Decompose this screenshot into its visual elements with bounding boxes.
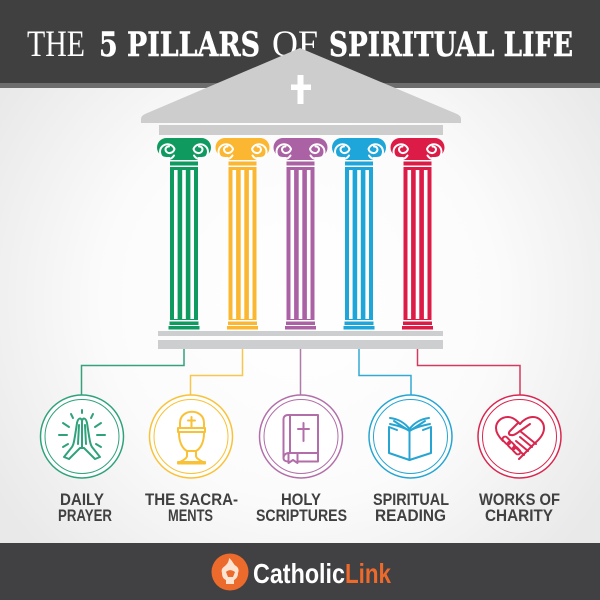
label: holy scriptures: HOLY	[281, 491, 321, 509]
title: THE	[27, 24, 85, 65]
temple roof	[141, 48, 461, 123]
connector: red	[418, 349, 520, 395]
pillar: yellow	[216, 138, 270, 330]
circle icon: praying hands	[40, 395, 124, 478]
circle icon: bible	[260, 395, 342, 478]
pillar: green	[157, 138, 211, 330]
entablature	[159, 125, 443, 135]
connector: blue	[359, 349, 411, 395]
icon: flame cup	[212, 554, 248, 590]
icon: roof cross	[291, 75, 311, 104]
label: the sacraments: THE SACRA-	[145, 491, 238, 509]
item: spiritual reading	[369, 395, 452, 525]
label: works of charity	[479, 491, 560, 525]
pillar: red	[390, 138, 444, 330]
label: the sacraments	[145, 491, 238, 525]
item: the sacraments	[145, 395, 238, 525]
label: spiritual reading: SPIRITUAL	[373, 491, 449, 509]
label: holy scriptures: SCRIPTURES	[256, 507, 347, 525]
title	[27, 24, 573, 65]
circle icon: heart handshake	[478, 395, 561, 478]
pillar: purple	[274, 138, 328, 330]
item: daily prayer	[40, 395, 124, 525]
label: daily prayer: PRAYER	[58, 507, 112, 525]
label: works of charity: CHARITY	[485, 507, 553, 525]
label: works of charity: WORKS OF	[479, 491, 560, 509]
circle icon: chalice	[150, 395, 232, 478]
connector: purple	[300, 349, 302, 395]
label: spiritual reading	[373, 491, 449, 525]
footer logo	[212, 554, 391, 590]
label: daily prayer: DAILY	[60, 491, 104, 509]
connector: green	[82, 349, 184, 395]
item: works of charity	[478, 395, 561, 525]
label: spiritual reading: READING	[375, 507, 446, 525]
title: OF	[272, 24, 318, 65]
label: holy scriptures	[256, 491, 347, 525]
title: 5 PILLARS	[99, 25, 260, 65]
circle icon: open book	[369, 395, 452, 478]
item: holy scriptures	[256, 395, 347, 525]
wordmark: Link	[345, 558, 391, 589]
header band	[0, 0, 600, 88]
temple base	[158, 331, 443, 349]
wordmark: Catholic	[253, 558, 345, 589]
label: the sacraments: MENTS	[168, 507, 213, 525]
footer band	[0, 543, 600, 600]
pillar: blue	[332, 138, 386, 330]
label: daily prayer	[58, 491, 112, 525]
connector: yellow	[190, 349, 242, 395]
